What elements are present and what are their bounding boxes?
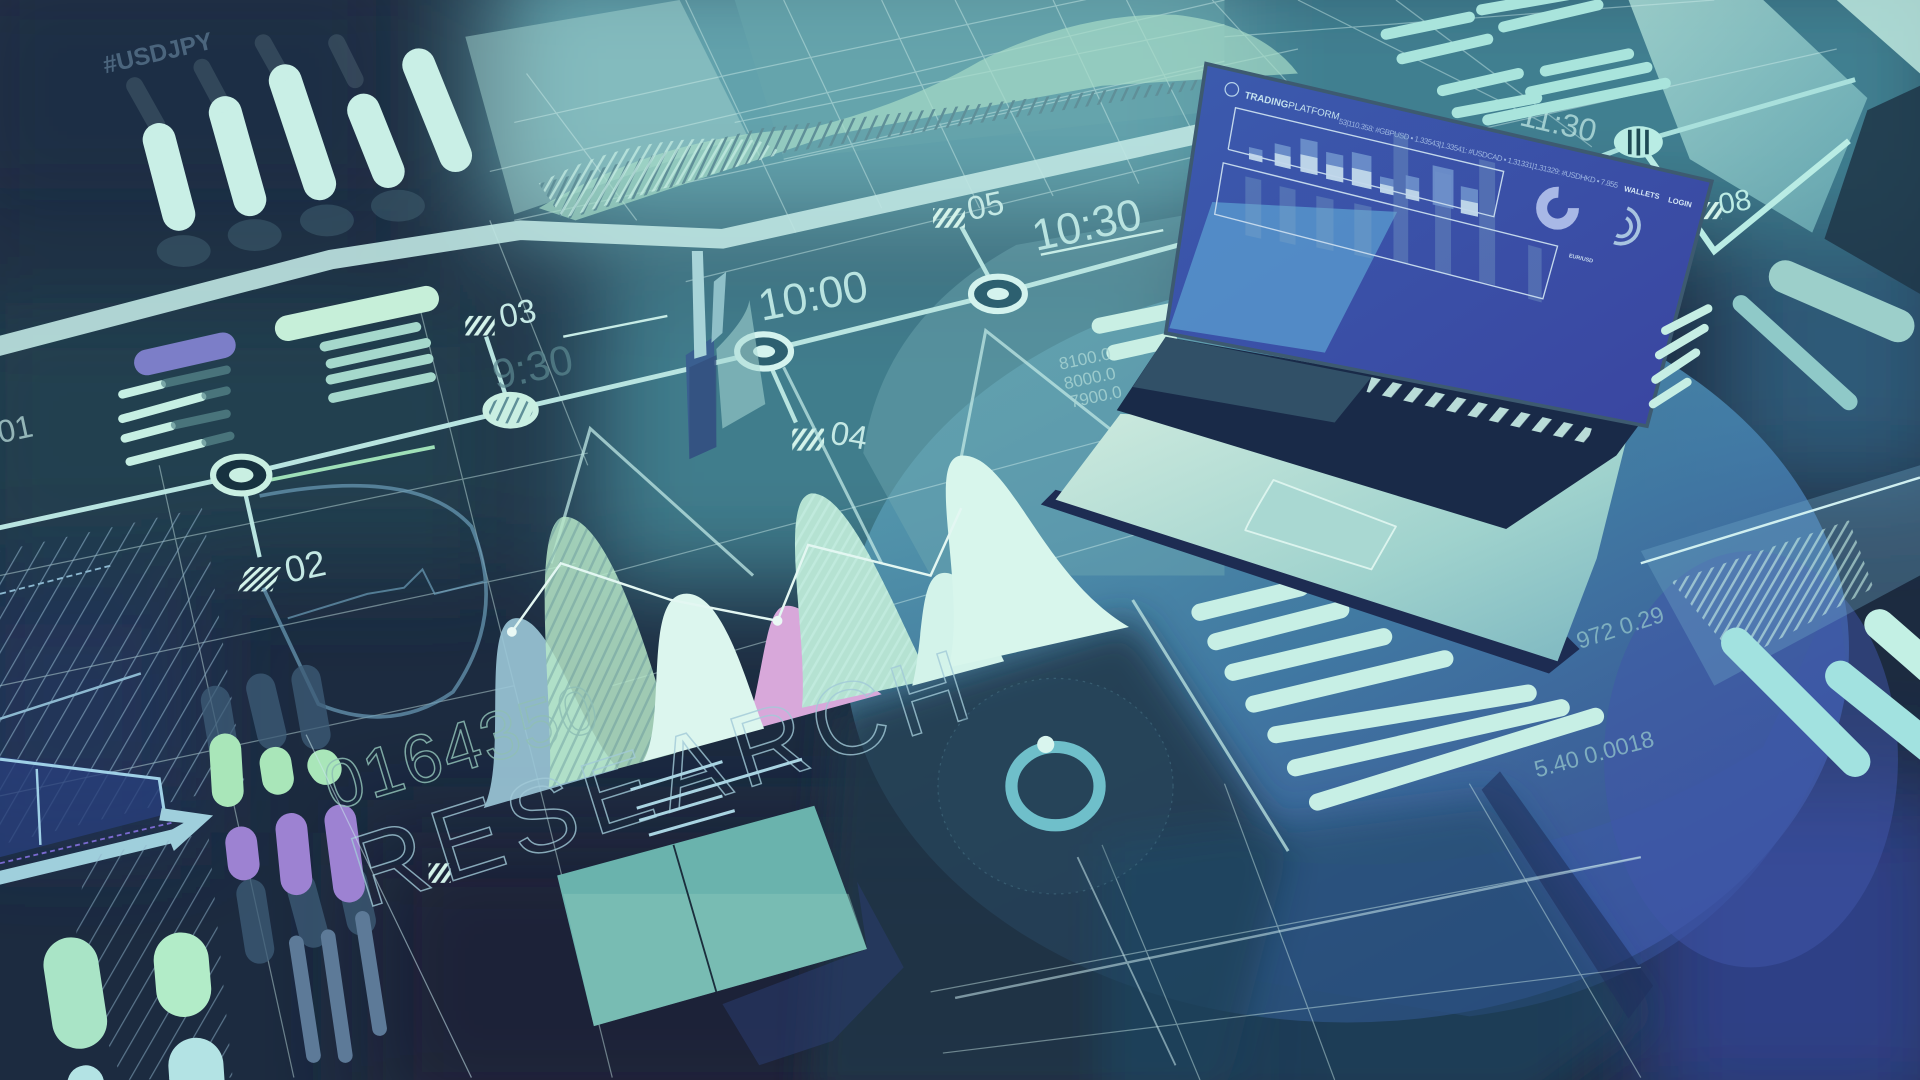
text: centre right values [1057,343,1124,412]
node 02 [213,457,269,493]
timeline with nodes [0,227,1224,557]
arrow: left lower [0,808,213,879]
overlay lines [306,735,1641,1078]
screen title: TRADINGPLATFORM [1243,90,1340,123]
labels: timeline numbers [0,184,1146,591]
text: top right time: 11:30 [1517,97,1600,149]
text: lower right values [1531,601,1667,782]
chart: triangles outline [551,331,1288,851]
screen donut [1542,192,1573,224]
laptop palm rest [1056,414,1629,661]
bar chart: top left [135,43,456,267]
panel: left purple pill group [122,345,230,462]
bars: beside laptop left [1100,304,1206,353]
node 05 [971,277,1025,311]
screen pair label: EUR/USD [1568,253,1594,265]
node 03 [482,392,539,429]
panel: top right block [1629,0,1920,294]
text: number: 0164350 [315,668,609,825]
bars: horizontal lower centre [1200,588,1596,802]
laptop screen [1166,64,1712,426]
panel: top centre light block [465,0,1224,214]
node: top right with arrow [1561,80,1855,251]
labels: timeline numbers: 04 [828,415,870,458]
panel: dark lower centre [808,618,1647,1080]
text: centre right values: 8100.0 [1057,343,1112,374]
chart: top area curve [539,15,1298,220]
panel: left light bar group [288,299,431,398]
chart: hatch strokes bottom left [73,833,233,1080]
chart: large pills bottom left [71,960,198,1080]
chart: small pills centre left [216,680,380,1056]
labels: timeline numbers: 02 [281,542,329,591]
screen tall columns [1245,132,1542,302]
screen logo [1225,83,1239,96]
text: centre right values: 8000.0 [1062,363,1117,393]
labels: timeline numbers: 03 [496,292,540,336]
screen chart frames [1215,108,1558,299]
chart: hump area chart [484,455,1129,808]
labels: timeline numbers: 10:30 [1028,190,1146,261]
icon: pen holder [686,251,765,459]
chart: lower right hatched bars [1641,465,1920,762]
line: main trend band [0,132,1206,349]
bars: right of laptop [1653,277,1898,404]
labels: timeline numbers: 10:00 [754,261,872,331]
node: top right with arrow: 08 [1716,183,1754,221]
small lines over research [631,759,802,835]
screen bar chart [1249,138,1478,217]
screen ticker: 53|110.358: #GBPUSD ▪ 1.33543|1.33541: #USDCAD ▪ 1.31331|1.31329: #USDHKD ▪ 7.855 [1338,117,1620,190]
text: lower right values: 5.40 0.0018 [1531,725,1657,782]
laptop shadow [1041,490,1580,673]
chart: gauge outline left [260,486,486,717]
labels: timeline numbers: 9:30 [488,335,577,398]
bars: top right [1386,0,1665,120]
panel: teal rectangle bottom [557,806,904,1065]
laptop keyboard glare [1133,337,1371,422]
laptop trackpad [1245,480,1396,569]
laptop [1041,64,1712,673]
text: centre right values: 7900.0 [1068,381,1124,412]
screen nav: WALLETS [1623,184,1661,201]
laptop screen reflection [1169,202,1397,353]
labels: timeline numbers: 05 [964,184,1007,228]
panel: left hatched chart [0,508,245,857]
node 04 [737,334,791,369]
icons: hatch markers [238,208,965,883]
text: research: RESEARCH [337,624,991,930]
panel: dark diagonal strip [1482,771,1653,1019]
screen login: LOGIN [1667,195,1693,209]
chart: ring gauge [938,678,1173,894]
hatch hinge strip [1367,377,1592,443]
label: USDJPY: #USDJPY [101,28,215,79]
panel: large translucent circle [845,208,1898,1022]
text: lower right values: 972 0.29 [1573,601,1667,654]
screen radial [1614,208,1639,244]
laptop keyboard [1117,337,1641,529]
